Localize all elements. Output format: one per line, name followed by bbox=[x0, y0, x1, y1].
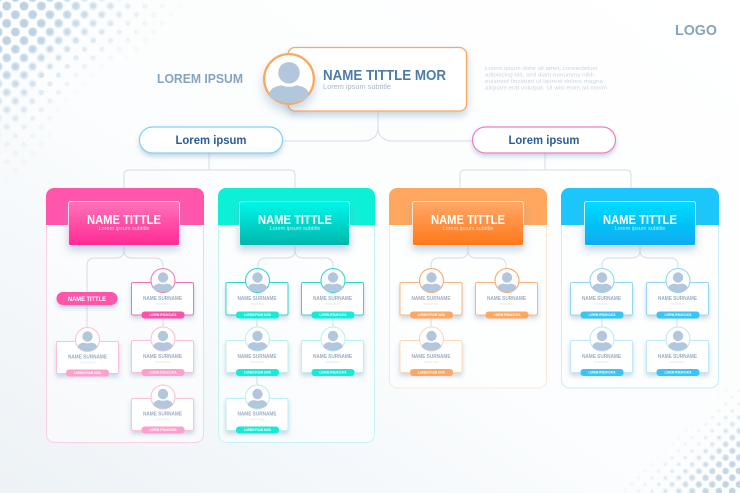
card: blue 3: NAME SURNAME bbox=[582, 354, 621, 360]
panel: orange bbox=[389, 188, 547, 388]
title box: blue: Lorem ipsum subtitle bbox=[614, 226, 666, 232]
card: teal 1: LOREM IPSUM DATA bbox=[244, 313, 272, 317]
card: teal 4 bbox=[302, 327, 364, 376]
card: teal 5: POSITION bbox=[250, 418, 264, 422]
card: blue 3: LOREM IPSUM DATA bbox=[588, 371, 616, 375]
card: orange 1: POSITION bbox=[424, 302, 438, 306]
card: blue 4: LOREM IPSUM DATA bbox=[664, 371, 692, 375]
card: blue 1: POSITION bbox=[594, 302, 609, 306]
card: blue 4: NAME SURNAME bbox=[658, 354, 697, 360]
card: orange 3: LOREM IPSUM DATA bbox=[418, 371, 446, 375]
card: orange 1: LOREM IPSUM DATA bbox=[418, 313, 446, 317]
panel: blue bbox=[561, 188, 719, 388]
card: teal 1 bbox=[226, 268, 288, 318]
card: teal 5 bbox=[226, 385, 288, 434]
card: blue 2 bbox=[646, 268, 708, 318]
title box: teal: Lorem ipsum subtitle bbox=[270, 226, 320, 232]
card: orange 3: NAME SURNAME bbox=[412, 354, 451, 360]
title box: teal: NAME TITTLE bbox=[258, 213, 332, 227]
card: blue 4 bbox=[646, 327, 708, 376]
card: teal 3: LOREM IPSUM DATA bbox=[244, 371, 272, 375]
card: pink 3: POSITION bbox=[155, 418, 170, 422]
card: pink left bbox=[56, 328, 118, 376]
card: orange 2: LOREM IPSUM DATA bbox=[494, 313, 521, 317]
pill: left branch bbox=[140, 127, 282, 153]
heading: lorem ipsum: LOREM IPSUM bbox=[157, 71, 243, 86]
card: blue 2: NAME SURNAME bbox=[658, 296, 697, 302]
title box: orange: Lorem ipsum subtitle bbox=[442, 226, 494, 232]
tag: name title bbox=[56, 292, 118, 305]
card: pink 2: POSITION bbox=[155, 360, 170, 364]
card: orange 1 bbox=[400, 268, 462, 318]
card: blue 2: LOREM IPSUM DATA bbox=[664, 313, 692, 317]
card: teal 2 bbox=[302, 268, 364, 318]
card: pink 1: POSITION bbox=[155, 302, 170, 306]
logo: LOGO bbox=[675, 22, 717, 39]
card: orange 3 bbox=[400, 327, 462, 376]
title box: orange: NAME TITTLE bbox=[431, 213, 505, 227]
card: pink left: NAME SURNAME bbox=[68, 354, 107, 360]
card: pink 2 bbox=[132, 327, 194, 376]
card: teal 3 bbox=[226, 327, 288, 376]
card: pink 2: LOREM IPSUM DATA bbox=[150, 371, 177, 375]
panel: teal bbox=[218, 188, 375, 442]
card: teal 1: POSITION bbox=[250, 302, 264, 306]
card: orange 2: NAME SURNAME bbox=[487, 296, 526, 302]
card: teal 2: POSITION bbox=[325, 302, 340, 306]
card: teal 4: POSITION bbox=[325, 360, 340, 364]
card: pink 1: NAME SURNAME bbox=[143, 296, 182, 302]
card: orange 2 bbox=[476, 268, 538, 318]
pill: right branch bbox=[472, 127, 616, 153]
card: blue 1: NAME SURNAME bbox=[582, 296, 621, 302]
card: teal 3: POSITION bbox=[250, 360, 264, 364]
card: blue 3: POSITION bbox=[594, 360, 609, 364]
card: teal 1: NAME SURNAME bbox=[238, 296, 277, 302]
text block: description bbox=[485, 66, 608, 92]
title box: pink: NAME TITTLE bbox=[87, 213, 161, 227]
card: teal 2: NAME SURNAME bbox=[313, 296, 352, 302]
top card subtitle: Lorem ipsum subtitle bbox=[323, 84, 391, 91]
title box: pink bbox=[68, 202, 180, 246]
title box: teal bbox=[240, 202, 350, 246]
connectors: top level bbox=[124, 111, 631, 188]
card: orange 1: NAME SURNAME bbox=[412, 296, 451, 302]
card: blue 3 bbox=[570, 327, 632, 376]
text block: description: adipiscing elit, sed diam nonummy nibh bbox=[485, 72, 594, 78]
pill: right branch: Lorem ipsum bbox=[508, 135, 580, 147]
card: pink left: POSITION bbox=[80, 360, 95, 364]
card: teal 5: NAME SURNAME bbox=[238, 412, 277, 418]
card: teal 4: NAME SURNAME bbox=[313, 354, 352, 360]
card: teal 2: LOREM IPSUM DATA bbox=[320, 313, 347, 317]
card: teal 3: NAME SURNAME bbox=[238, 354, 277, 360]
card: pink 3: NAME SURNAME bbox=[143, 412, 182, 418]
title box: pink: Lorem ipsum subtitle bbox=[98, 226, 150, 232]
card: pink 1: LOREM IPSUM DATA bbox=[150, 313, 177, 317]
card: pink 2: NAME SURNAME bbox=[143, 354, 182, 360]
top card bbox=[264, 48, 466, 111]
tag: name title: NAME TITTLE bbox=[68, 296, 107, 303]
card: orange 2: POSITION bbox=[499, 302, 514, 306]
title box: blue: NAME TITTLE bbox=[603, 213, 677, 227]
card: pink 1 bbox=[132, 268, 194, 318]
card: pink left: LOREM IPSUM DATA bbox=[74, 371, 102, 375]
pill: left branch: Lorem ipsum bbox=[176, 135, 246, 147]
card: teal 4: LOREM IPSUM DATA bbox=[320, 371, 347, 375]
card: blue 2: POSITION bbox=[670, 302, 685, 306]
card: teal 5: LOREM IPSUM DATA bbox=[244, 428, 272, 432]
title box: blue bbox=[584, 202, 696, 246]
panel: pink bbox=[46, 188, 204, 442]
text block: description: euismod tincidunt ut laoreet dolore magna bbox=[485, 79, 603, 85]
card: blue 1: LOREM IPSUM DATA bbox=[588, 313, 616, 317]
icon: top avatar bbox=[264, 54, 314, 104]
text block: description: aliquam erat volutpat. Ut wisi enim ad minim bbox=[485, 86, 608, 92]
card: blue 4: POSITION bbox=[670, 360, 685, 364]
card: pink 3: LOREM IPSUM DATA bbox=[150, 428, 177, 432]
title box: orange bbox=[412, 202, 524, 246]
card: orange 3: POSITION bbox=[424, 360, 438, 364]
text block: description: Lorem ipsum dolor sit amet, consectetuer bbox=[485, 66, 598, 72]
card: blue 1 bbox=[570, 268, 632, 318]
card: pink 3 bbox=[132, 385, 194, 434]
top card title: NAME TITTLE MOR bbox=[323, 68, 446, 84]
